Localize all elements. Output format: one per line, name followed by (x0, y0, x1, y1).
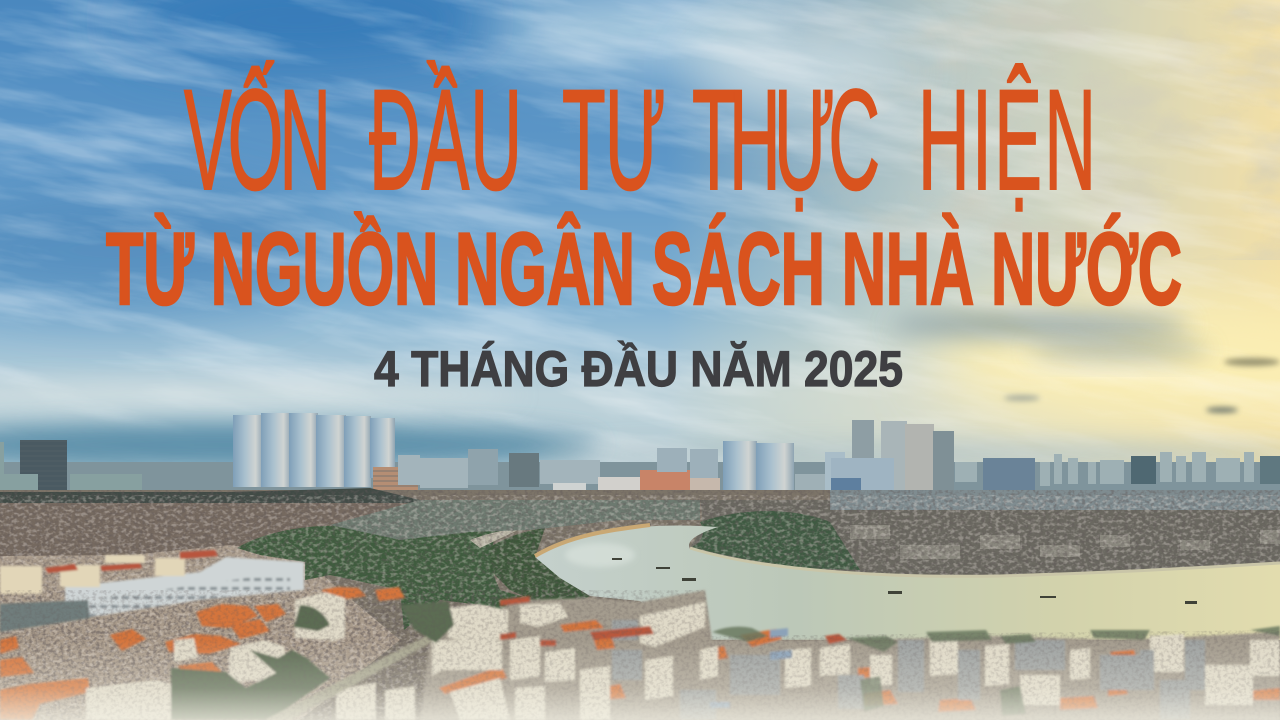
word: THỰC: THỰC (692, 60, 880, 219)
foreground texture (0, 590, 1280, 720)
peninsula coloured houses (850, 525, 1280, 559)
brown building (373, 467, 418, 502)
word: HIỆN: HIỆN (918, 60, 1096, 219)
word: VỐN: VỐN (184, 60, 331, 219)
city ground (0, 488, 1280, 720)
word: TƯ: TƯ (562, 60, 666, 219)
far right blocks (955, 452, 1280, 493)
subtitle date: 4 THÁNG ĐẦU NĂM 2025 (374, 341, 903, 397)
left low blocks (0, 442, 142, 492)
green park (237, 524, 590, 630)
trees left foreground (171, 601, 454, 720)
grey houses (612, 620, 1205, 720)
middle block row (398, 448, 720, 513)
sky background (0, 0, 1280, 462)
left dark tower (20, 440, 67, 490)
right tower cluster (825, 420, 954, 510)
red-brown accents (500, 596, 847, 646)
long white building (65, 557, 304, 617)
green shoreline (712, 626, 1280, 716)
blue roofs (710, 628, 792, 708)
left middle houses (0, 545, 400, 720)
river (535, 525, 1280, 640)
red roofs row (45, 550, 218, 573)
bottom haze fade (0, 640, 1280, 720)
title line 1 (184, 60, 1096, 219)
tower cluster left (233, 413, 395, 487)
word: ĐẦU: ĐẦU (369, 60, 522, 219)
mid bank buildings (330, 500, 700, 540)
peninsula city (690, 500, 1280, 576)
grey low block (0, 600, 90, 632)
centre towers (723, 441, 831, 506)
orange roofs (0, 587, 1280, 720)
city texture (0, 490, 1280, 720)
skyline (0, 413, 1280, 513)
rail road (265, 636, 432, 720)
embankment road (470, 522, 535, 548)
left dense city (0, 503, 540, 560)
cream houses (86, 592, 1280, 720)
foreground houses (0, 550, 1280, 720)
far left tree band (0, 488, 560, 512)
left row houses (0, 555, 185, 594)
boats (612, 558, 1197, 604)
